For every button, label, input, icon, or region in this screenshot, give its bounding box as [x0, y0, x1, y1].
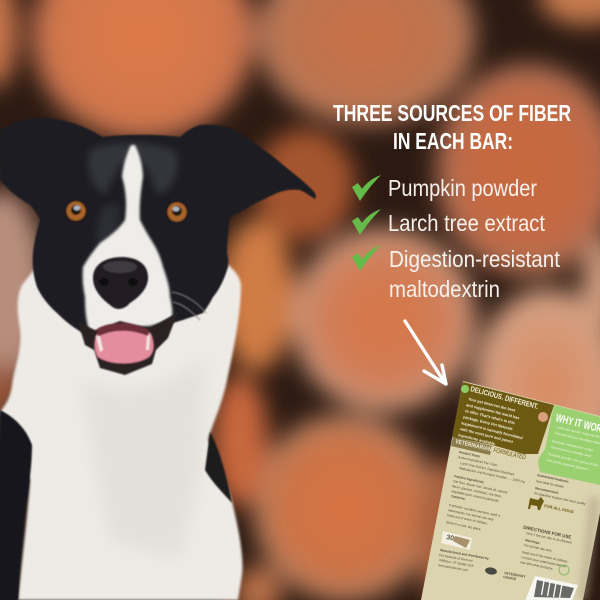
- header text: Your pet deserves the best: [468, 397, 516, 413]
- left black shoulder: [0, 410, 32, 600]
- why it works text: that gently supports digestion: [547, 458, 588, 471]
- forehead grey highlights: [88, 143, 178, 195]
- supplement facts text left: Product Facts: [459, 450, 481, 458]
- dog silhouette icon: [528, 497, 544, 510]
- list item: digestion-resistant maltodextrin: Digestion-resistant: [389, 246, 561, 272]
- check icon 3: [352, 245, 381, 271]
- white blaze and muzzle: [83, 145, 172, 338]
- supplement facts text left: veterinarian. For animal use only.: [448, 508, 495, 522]
- veterinarian formulated banner: [451, 437, 526, 461]
- right column text: FOR ALL DOGS: [544, 503, 575, 514]
- supplement facts text left: Active Ingredients Per 1 Bar:: [458, 455, 498, 467]
- muzzle grey cheek highlight: [96, 205, 120, 250]
- right column text: Give 1 bar per day or as directed: [526, 531, 572, 545]
- right black shoulder patch: [205, 432, 232, 503]
- supplement facts text left: Larch Tree Extract, Digestion Resistant: [460, 461, 515, 476]
- olive header panel: [452, 382, 554, 454]
- right column text: use with other products.: [520, 560, 554, 571]
- whiskers: [172, 292, 206, 320]
- header text: DELICIOUS. DIFFERENT.: [469, 384, 539, 411]
- heading: [333, 100, 571, 154]
- dog white chest and body: [0, 262, 243, 600]
- mouth and tongue: [78, 312, 178, 375]
- right column text: DIRECTIONS FOR USE: [523, 525, 572, 540]
- dog photo: [0, 118, 316, 600]
- vet approved mark: VETERINARY: [504, 571, 527, 579]
- check icon 2: [352, 209, 381, 235]
- supplement facts text left: Pet Naturals of Vermont: [439, 553, 473, 563]
- right column text: See label for details: [536, 479, 564, 489]
- check icon 1: [352, 175, 381, 201]
- arrow pointing to package: [405, 321, 446, 384]
- heading: IN EACH BAR:: [393, 128, 513, 154]
- veterinarian formulated banner: FORMULATED: [493, 447, 526, 461]
- list item: larch tree extract: Larch tree extract: [388, 210, 546, 236]
- why it works text: Larch tree extract: Supports the: [556, 425, 600, 439]
- supplement facts text left: flavor, glycerin, molasses, rice bran,: [452, 484, 502, 499]
- barcode: [525, 576, 578, 600]
- 30 count badge: 30: [446, 534, 455, 543]
- why it works text: that promotes a healthy stool: [551, 445, 592, 458]
- supplement facts text left: Manufactured and distributed by: [440, 548, 489, 561]
- package body: [421, 381, 600, 600]
- green ring logo: [559, 565, 569, 575]
- hang hole: [538, 412, 548, 422]
- veterinarian formulated banner: VETERINARIAN: [455, 439, 492, 453]
- right column text: Consult your veterinarian before: [521, 555, 566, 568]
- supplement facts text left: Oat flour, brown rice, canola oil, natural: [453, 479, 508, 495]
- list item: digestion-resistant maltodextrin: maltodextrin: [389, 276, 500, 302]
- round leaf logo: [461, 385, 469, 393]
- right eye: [166, 201, 188, 223]
- 30 count badge: [441, 531, 472, 550]
- supplement facts text left: Store in a cool, dry place.: [446, 520, 482, 531]
- package right edge shading: [578, 495, 600, 600]
- certification seal: [484, 567, 498, 575]
- list item: digestion-resistant maltodextrin: [389, 246, 561, 302]
- supplement facts text left: www.petnaturals.com: [438, 563, 469, 572]
- header text: with the most pure and potent: [459, 427, 514, 444]
- nose: [93, 257, 148, 309]
- product package back: [421, 381, 600, 600]
- header text: to offer. That's what's in this: [465, 409, 515, 425]
- green why it works panel: [538, 405, 600, 485]
- why it works text: Pumpkin powder: rich source of fiber: [548, 452, 600, 468]
- vet approved mark: [503, 571, 527, 581]
- supplement facts text left: Maltodextrin and Pumpkin Powder ..... 1000 mg: [459, 466, 526, 484]
- supplement facts text left: Inactive Ingredients:: [454, 474, 485, 484]
- right column text: Recommended:: [535, 486, 559, 495]
- header text: and supplement the world has: [466, 403, 520, 420]
- fiber source checklist: [352, 175, 561, 302]
- chest shading: [80, 350, 205, 560]
- header text: ingredients available.: [458, 433, 496, 446]
- supplement facts text left: Keep out of reach of children.: [447, 513, 488, 526]
- right column text: for digestive support and stool quality: [534, 491, 586, 506]
- supplement facts text left: vegetable gum, mixed tocopherols: [451, 489, 500, 503]
- why it works text: Resistant maltodextrin: a fiber: [552, 439, 595, 453]
- supplement facts text left: Williston, VT 05495 USA: [439, 558, 475, 568]
- header text: package. Every Pet Naturals: [463, 415, 513, 431]
- supplement facts text left: [438, 450, 526, 572]
- vet approved mark: CHOICE: [503, 575, 517, 581]
- left eye: [65, 200, 87, 222]
- why it works text: [547, 412, 600, 471]
- header text: [458, 384, 539, 446]
- right column text: Guaranteed Analysis:: [537, 473, 570, 484]
- header text: supplement is naturally formulated: [461, 421, 524, 440]
- supplement facts text left: If animal's condition worsens, seek a: [449, 503, 501, 518]
- right column text: Warnings:: [525, 538, 541, 545]
- head black fur with ears: [0, 118, 316, 345]
- list item: pumpkin powder: Pumpkin powder: [388, 175, 537, 201]
- right column text: [520, 473, 586, 571]
- supplement facts text left: Cautions:: [451, 494, 466, 501]
- right column text: For animal use only.: [524, 543, 553, 553]
- right column text: Keep out of the reach of children.: [522, 550, 569, 564]
